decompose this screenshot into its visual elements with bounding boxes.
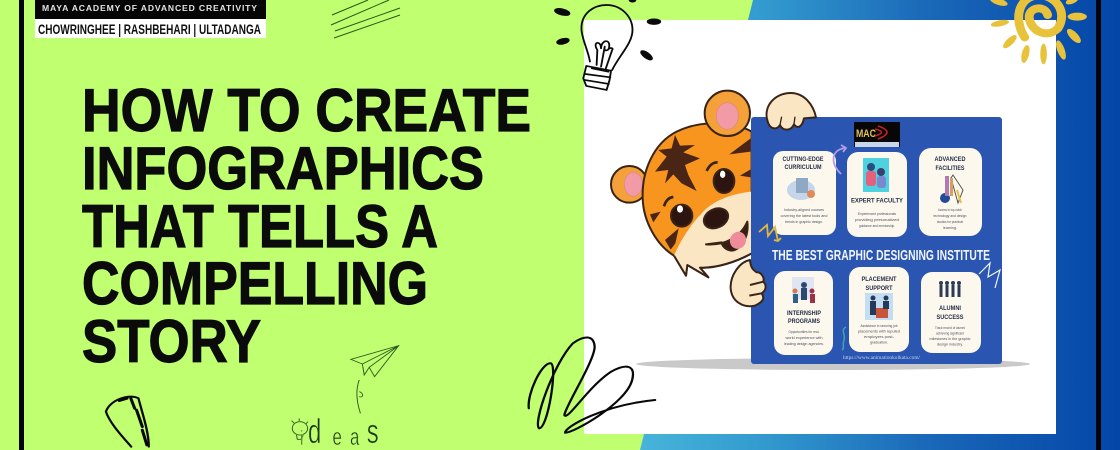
card: alumni success: SUCCESS xyxy=(936,315,964,321)
arrow: yellow zigzag xyxy=(759,225,781,241)
icon: paper plane xyxy=(351,346,399,413)
card: alumni success: Track record of alumni xyxy=(935,326,965,330)
board logo xyxy=(854,122,900,147)
title: STORY xyxy=(82,308,261,375)
left frame bar xyxy=(19,0,24,450)
card: advanced facilities: learning. xyxy=(943,226,957,230)
arrow: white zigzag xyxy=(979,263,1000,288)
arrow: teal squiggle xyxy=(842,327,846,350)
card: advanced facilities: studios for practical xyxy=(937,220,963,224)
card: alumni success: ALUMNI xyxy=(939,306,961,312)
card: advanced facilities: ADVANCED xyxy=(934,157,966,163)
card: placement support: Assistance in securing job xyxy=(860,324,898,328)
board url: https://www.animationkolkata.com/ xyxy=(843,355,920,361)
card: placement support: graduation. xyxy=(870,340,888,344)
icon: ideas doodle: s xyxy=(367,413,379,450)
card: placement support: SUPPORT xyxy=(866,286,893,292)
white panel xyxy=(584,20,1056,434)
title: INFOGRAPHICS xyxy=(82,135,484,202)
logo: Maya Academy: MAYA ACADEMY OF ADVANCED CREATIVITY xyxy=(42,3,257,13)
title: COMPELLING xyxy=(82,250,428,317)
board heading: THE BEST GRAPHIC DESIGNING INSTITUTE xyxy=(772,248,990,264)
icon: sun xyxy=(989,0,1087,64)
decorative pen lines xyxy=(331,0,400,38)
card: internship programs: PROGRAMS xyxy=(788,319,820,325)
card: cutting-edge curriculum: CUTTING-EDGE xyxy=(782,157,824,163)
card: advanced facilities: technology and design xyxy=(934,214,966,218)
card: expert faculty: EXPERT FACULTY xyxy=(851,198,903,204)
icon: ideas doodle: d xyxy=(308,413,321,450)
card: placement support: employers post- xyxy=(864,335,895,339)
card: alumni success: design industry. xyxy=(937,342,963,346)
card: placement support: placements with reputed xyxy=(858,330,900,334)
card: cutting-edge curriculum: Industry-aligned courses xyxy=(784,208,824,212)
card: alumni success: achieving significant xyxy=(936,332,964,336)
icon: ideas doodle xyxy=(292,413,379,450)
arrow: purple curve xyxy=(834,145,846,174)
card: internship programs: leading design agencies. xyxy=(784,342,824,346)
title: THAT TELLS A xyxy=(82,193,438,260)
card: internship programs: Opportunities for real- xyxy=(788,330,820,334)
card: expert faculty: guidance and mentorship. xyxy=(859,224,895,228)
icon: ideas doodle: a xyxy=(350,424,360,450)
card: expert faculty xyxy=(847,152,907,237)
tiger mascot head xyxy=(611,91,752,277)
card: placement support: PLACEMENT xyxy=(862,277,897,283)
icon: bottom-left bulb xyxy=(106,397,149,447)
infographic board xyxy=(751,117,1002,364)
tiger hand bottom xyxy=(731,260,766,306)
card: advanced facilities xyxy=(919,148,982,236)
card: internship programs: INTERNSHIP xyxy=(787,311,821,317)
icon: light bulb xyxy=(554,0,660,90)
right frame bar xyxy=(1096,0,1101,450)
icon: ideas doodle: e xyxy=(332,424,342,450)
card: advanced facilities: Access to top-notch xyxy=(938,208,962,212)
scribble xyxy=(529,337,655,433)
card: advanced facilities: FACILITIES xyxy=(936,166,964,172)
card: expert faculty: Experienced professionals xyxy=(858,212,896,216)
card: cutting-edge curriculum: trends in graphic design. xyxy=(785,220,823,224)
card: internship programs: world experience with xyxy=(786,336,822,340)
card: expert faculty: providing personalized xyxy=(855,218,899,222)
blue background panel xyxy=(640,0,1120,450)
card: cutting-edge curriculum: covering the latest tools and xyxy=(780,214,828,218)
card: cutting-edge curriculum: CURRICULUM xyxy=(784,165,822,171)
logo: Maya Academy xyxy=(35,0,266,38)
title xyxy=(82,77,531,375)
logo: Maya Academy: CHOWRINGHEE | RASHBEHARI | ULTADANGA xyxy=(38,22,261,37)
tiger hand top xyxy=(767,93,816,130)
title: HOW TO CREATE xyxy=(82,77,531,144)
icon: ideas doodle: i xyxy=(300,426,303,450)
card: alumni success: milestones in the graphic xyxy=(930,337,971,341)
card: placement support xyxy=(849,267,909,352)
card: alumni success xyxy=(921,272,981,353)
card: internship programs xyxy=(774,271,833,355)
board shadow xyxy=(636,358,1030,370)
card: cutting-edge curriculum xyxy=(773,151,836,235)
board logo: MAC xyxy=(856,128,876,140)
